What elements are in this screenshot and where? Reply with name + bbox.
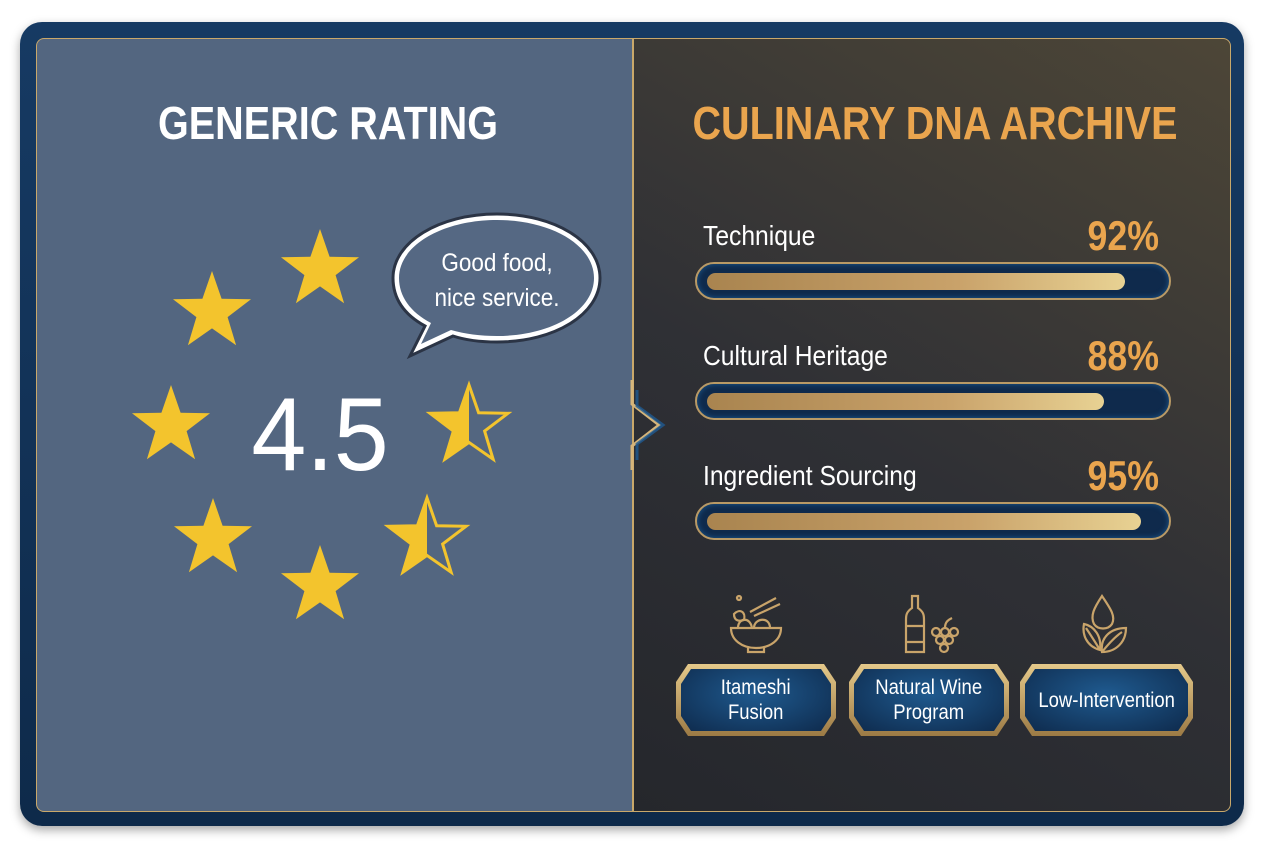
badge: low-intervention: Low-Intervention xyxy=(1038,688,1175,712)
metric: cultural heritage: Cultural Heritage xyxy=(703,340,888,371)
icon: noodle bowl xyxy=(730,594,782,654)
arrow: divider chevron xyxy=(630,380,666,470)
speech bubble: Good food, xyxy=(441,249,553,277)
heading: generic rating: GENERIC RATING xyxy=(158,97,498,149)
metric: ingredient sourcing: Ingredient Sourcing xyxy=(703,460,917,491)
badge: itameshi fusion: Fusion xyxy=(728,701,784,724)
icon: leaves and drop xyxy=(1082,594,1128,654)
bar: technique 92% xyxy=(695,262,1171,300)
bar: cultural heritage 88% xyxy=(695,382,1171,420)
badge: itameshi fusion xyxy=(676,664,836,736)
panel: culinary DNA archive xyxy=(632,38,1231,812)
speech bubble xyxy=(392,212,602,359)
star ring with score xyxy=(132,229,512,620)
metric: ingredient sourcing xyxy=(695,452,1171,540)
metric: cultural heritage: 88% xyxy=(1088,332,1159,379)
score: 4.5 xyxy=(251,377,389,493)
badge: natural wine program: Program xyxy=(894,701,964,724)
metric: technique: Technique xyxy=(703,220,815,251)
heading: culinary DNA archive: CULINARY DNA ARCHIVE xyxy=(692,97,1177,149)
badge: natural wine program: Natural Wine xyxy=(876,676,982,699)
metric: cultural heritage xyxy=(695,332,1171,420)
speech bubble: nice service. xyxy=(435,284,559,312)
bar: ingredient sourcing 95% xyxy=(695,502,1171,540)
badge: low-intervention xyxy=(1020,664,1193,736)
metric: technique xyxy=(695,212,1171,300)
metric: ingredient sourcing: 95% xyxy=(1088,452,1159,499)
icon: wine and grapes xyxy=(904,594,960,654)
badge: natural wine program xyxy=(849,664,1009,736)
badge: itameshi fusion: Itameshi xyxy=(721,676,791,699)
panel: generic rating xyxy=(36,38,633,812)
metric: technique: 92% xyxy=(1088,212,1159,259)
